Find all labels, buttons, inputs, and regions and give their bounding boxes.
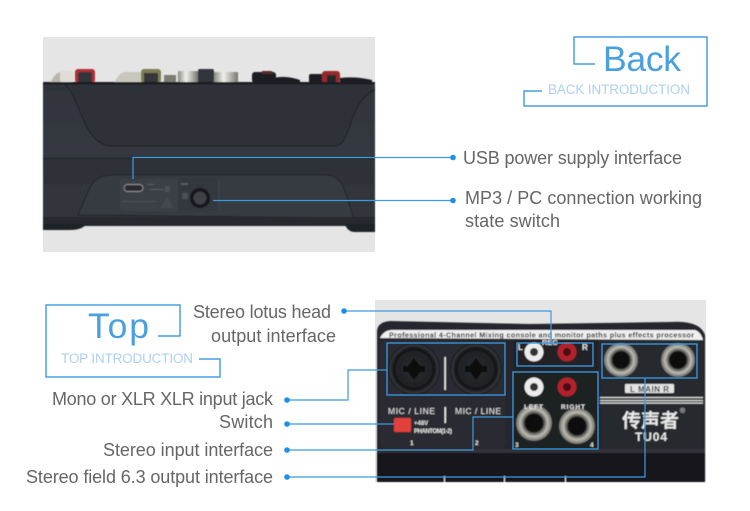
brand logo: 传声者 <box>622 410 679 432</box>
label strip: Professional 4-Channel Mixing console and monitor paths plus effects processor <box>389 330 694 340</box>
icon: REC RCA jacks: REC <box>542 338 558 347</box>
panels <box>380 340 506 448</box>
callout: USB power supply interface <box>133 148 682 179</box>
icon: rear body <box>43 82 375 224</box>
icon: XLR combo jacks <box>388 343 502 395</box>
mic line labels: PHANTOM(1-2) <box>414 429 452 435</box>
brand logo: TU04 <box>635 430 667 444</box>
icon: rear top connectors <box>51 69 372 83</box>
icon: stereo input jacks <box>515 378 595 449</box>
icon: USB port <box>124 184 143 192</box>
icon: rear feet <box>43 224 375 232</box>
mic line labels: 1 <box>410 440 414 447</box>
icon: REC RCA jacks: L <box>518 343 523 352</box>
heading: Back: Back <box>603 39 681 79</box>
callout: Stereo lotus head output interface: Stereo lotus head <box>193 302 331 322</box>
callout: MP3 / PC connection working state switch <box>213 188 702 231</box>
blue highlight boxes <box>387 343 697 449</box>
lower recess <box>78 175 354 218</box>
callout: Stereo input interface: Stereo input interface <box>103 440 273 460</box>
mic line labels: MIC / LINE <box>388 406 435 416</box>
callout: Switch: Switch <box>219 412 273 432</box>
callout: Mono or XLR XLR input jack <box>52 370 387 409</box>
icon: REC RCA jacks: R <box>582 343 588 352</box>
icon: stereo input jacks: RIGHT <box>561 404 585 411</box>
upper recess <box>65 85 375 146</box>
callout: Mono or XLR XLR input jack: Mono or XLR XLR input jack <box>52 389 274 409</box>
callout: Stereo field 6.3 output interface <box>26 378 645 487</box>
icon: state switch knob <box>190 188 210 208</box>
icon: stereo input jacks: LEFT <box>524 404 543 411</box>
panel: back photo of mixer <box>43 37 375 252</box>
icon: REC RCA jacks <box>518 338 588 362</box>
panel: top photo of mixer <box>375 300 706 482</box>
icon: main output jacks <box>604 343 695 377</box>
heading: Top: Top <box>88 306 149 346</box>
mic line labels: MIC / LINE <box>455 406 501 416</box>
callout: Stereo field 6.3 output interface: Stereo field 6.3 output interface <box>26 467 273 487</box>
mic line labels <box>388 406 501 447</box>
heading: Top: TOP INTRODUCTION <box>61 351 193 366</box>
brand logo <box>622 407 686 444</box>
callout: USB power supply interface: USB power supply interface <box>463 148 682 168</box>
brand logo: ® <box>680 407 686 415</box>
label plate <box>120 179 220 211</box>
callout: Stereo lotus head output interface <box>193 302 551 346</box>
heading: Top <box>46 305 220 377</box>
icon: stereo input jacks: 4 <box>590 442 594 449</box>
icon: stereo input jacks: 3 <box>515 442 519 449</box>
heading: Back: BACK INTRODUCTION <box>548 82 690 97</box>
callout: Stereo lotus head output interface: output interface <box>211 326 336 346</box>
callout: MP3 / PC connection working state switch: state switch <box>465 211 560 231</box>
icon: phantom power switch <box>394 418 411 432</box>
callout: MP3 / PC connection working state switch: MP3 / PC connection working <box>465 188 702 208</box>
label: L MAIN R: L MAIN R <box>630 385 669 394</box>
mixer top body <box>377 321 705 482</box>
mic line labels: 2 <box>475 440 479 447</box>
heading: Back <box>524 37 707 106</box>
callout: Stereo input interface <box>103 417 513 460</box>
callout: Switch <box>219 412 394 432</box>
mic line labels: +48V <box>414 421 428 427</box>
